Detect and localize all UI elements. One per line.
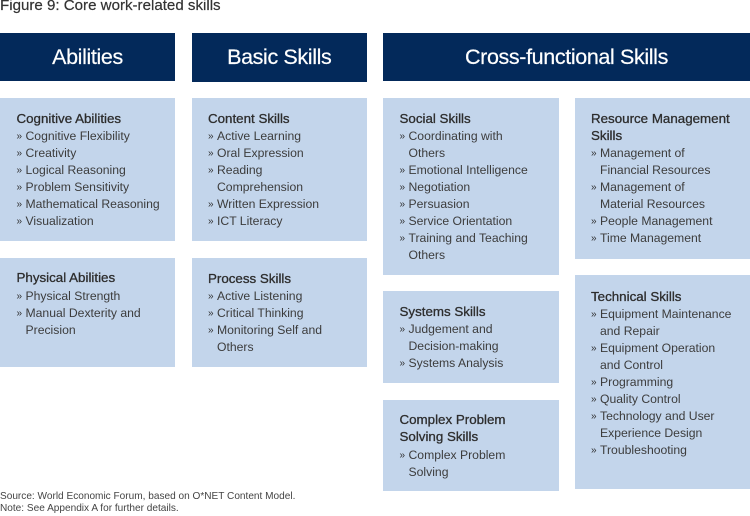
panel: Social Skills: »	[400, 182, 405, 193]
panel: Technical Skills: and Control	[600, 358, 663, 372]
header: Basic Skills	[192, 33, 367, 82]
panel: Systems Skills: »	[400, 324, 405, 335]
panel: Social Skills: »	[400, 165, 405, 176]
panel: Complex Problem Solving Skills: Solving	[408, 465, 448, 479]
panel: Technical Skills: Experience Design	[600, 426, 702, 440]
panel: Physical Abilities: Physical Abilities	[16, 270, 115, 285]
panel: Technical Skills: Technology and User	[600, 409, 714, 423]
panel: Complex Problem Solving Skills: Solving Skills	[400, 429, 478, 444]
panel: Content Skills: Comprehension	[217, 180, 303, 194]
panel: Social Skills	[383, 98, 558, 275]
panel: Technical Skills: »	[591, 445, 597, 456]
panel: Technical Skills: »	[591, 394, 597, 405]
panel: Social Skills: Others	[408, 248, 445, 262]
panel: Social Skills: Service Orientation	[408, 214, 512, 228]
panel: Systems Skills: Systems Analysis	[408, 356, 503, 370]
panel: Resource Management Skills: People Management	[600, 214, 712, 228]
panel: Cognitive Abilities	[0, 98, 175, 241]
panel: Resource Management Skills: Management of	[600, 146, 685, 160]
panel: Physical Abilities: »	[16, 291, 22, 302]
panel: Social Skills: Emotional Intelligence	[408, 163, 528, 177]
panel: Complex Problem Solving Skills: »	[400, 450, 405, 461]
panel: Social Skills: »	[400, 199, 405, 210]
panel: Social Skills: »	[400, 216, 405, 227]
panel: Resource Management Skills	[574, 98, 750, 259]
panel: Complex Problem Solving Skills: Complex Problem	[400, 412, 506, 427]
panel: Resource Management Skills: »	[591, 233, 597, 244]
panel: Physical Abilities: Manual Dexterity and	[26, 306, 141, 320]
panel: Systems Skills: »	[400, 358, 405, 369]
panel: Cognitive Abilities: Cognitive Abilities	[16, 111, 121, 126]
panel: Content Skills: »	[208, 199, 214, 210]
panel: Systems Skills: Judgement and	[408, 322, 493, 336]
panel: Resource Management Skills: »	[591, 182, 597, 193]
panel: Technical Skills: Programming	[600, 375, 673, 389]
panel: Technical Skills: Equipment Operation	[600, 341, 715, 355]
header: Basic Skills: Basic Skills	[227, 45, 331, 69]
panel: Resource Management Skills: Management of	[600, 180, 685, 194]
panel: Process Skills	[192, 258, 367, 367]
panel: Cognitive Abilities: Logical Reasoning	[26, 163, 126, 177]
panel: Physical Abilities	[0, 258, 175, 367]
panel: Technical Skills: and Repair	[600, 324, 660, 338]
source note: Note: See Appendix A for further details.	[0, 503, 179, 514]
panel: Social Skills: Negotiation	[408, 180, 470, 194]
panel: Social Skills: Others	[408, 146, 445, 160]
panel: Cognitive Abilities: »	[16, 182, 22, 193]
panel: Physical Abilities: »	[16, 308, 22, 319]
panel: Content Skills: Written Expression	[217, 197, 319, 211]
panel: Content Skills: »	[208, 216, 214, 227]
source note	[0, 490, 295, 514]
panel: Content Skills	[192, 98, 367, 241]
panel: Systems Skills: Systems Skills	[400, 304, 486, 319]
panel: Technical Skills: »	[591, 343, 597, 354]
panel: Process Skills: »	[208, 308, 214, 319]
panel: Cognitive Abilities: »	[16, 148, 22, 159]
panel: Resource Management Skills: Skills	[591, 128, 622, 143]
panel: Content Skills: ICT Literacy	[217, 214, 282, 228]
panel: Technical Skills: Quality Control	[600, 392, 681, 406]
panel: Social Skills: Coordinating with	[408, 129, 503, 143]
panel: Resource Management Skills: Time Management	[600, 231, 701, 245]
panel: Cognitive Abilities: Cognitive Flexibility	[26, 129, 130, 143]
panel: Technical Skills: Technical Skills	[591, 289, 681, 304]
panel: Process Skills: »	[208, 291, 214, 302]
panel: Physical Abilities: Physical Strength	[26, 289, 120, 303]
panel: Cognitive Abilities: Mathematical Reasoning	[26, 197, 160, 211]
panel: Technical Skills: »	[591, 377, 597, 388]
panel: Cognitive Abilities: »	[16, 165, 22, 176]
panel: Content Skills: »	[208, 148, 214, 159]
panel: Resource Management Skills: »	[591, 148, 597, 159]
panel: Content Skills: »	[208, 131, 214, 142]
panel: Process Skills: Monitoring Self and	[217, 323, 322, 337]
header: Abilities	[0, 33, 175, 81]
panel: Social Skills: Social Skills	[400, 111, 471, 126]
panel: Process Skills: Active Listening	[217, 289, 302, 303]
panel: Resource Management Skills: Financial Resources	[600, 163, 710, 177]
panel: Complex Problem Solving Skills	[383, 400, 558, 491]
panel: Systems Skills: Decision-making	[408, 339, 499, 353]
panel: Resource Management Skills: Material Resources	[600, 197, 705, 211]
panel: Social Skills: »	[400, 131, 405, 142]
source note: Source: World Economic Forum, based on O*NET Content Model.	[0, 490, 295, 502]
panel: Content Skills: »	[208, 165, 214, 176]
panel: Process Skills: Process Skills	[208, 271, 291, 286]
panel: Technical Skills: Troubleshooting	[600, 443, 687, 457]
header: Abilities: Abilities	[52, 45, 123, 69]
panel: Cognitive Abilities: »	[16, 131, 22, 142]
panel: Resource Management Skills: »	[591, 216, 597, 227]
panel: Process Skills: »	[208, 325, 214, 336]
header: Cross-functional Skills: Cross-functional Skills	[465, 45, 668, 69]
panel: Cognitive Abilities: »	[16, 199, 22, 210]
panel: Cognitive Abilities: Problem Sensitivity	[26, 180, 129, 194]
panel: Technical Skills: Equipment Maintenance	[600, 307, 731, 321]
panel: Content Skills: Reading	[217, 163, 262, 177]
panel: Technical Skills	[574, 275, 750, 489]
panel: Systems Skills	[383, 291, 558, 383]
panel: Social Skills: »	[400, 233, 405, 244]
panel: Content Skills: Oral Expression	[217, 146, 304, 160]
panel: Resource Management Skills: Resource Management	[591, 111, 730, 126]
panel: Cognitive Abilities: Visualization	[26, 214, 94, 228]
panel: Technical Skills: »	[591, 309, 597, 320]
panel: Complex Problem Solving Skills: Complex Problem	[408, 448, 505, 462]
panel: Physical Abilities: Precision	[26, 323, 76, 337]
panel: Social Skills: Persuasion	[408, 197, 469, 211]
panel: Cognitive Abilities: »	[16, 216, 22, 227]
panel: Content Skills: Content Skills	[208, 111, 290, 126]
panel: Technical Skills: »	[591, 411, 597, 422]
panel: Cognitive Abilities: Creativity	[26, 146, 76, 160]
panel: Social Skills: Training and Teaching	[408, 231, 528, 245]
header: Cross-functional Skills	[383, 33, 750, 81]
panel: Content Skills: Active Learning	[217, 129, 301, 143]
panel: Process Skills: Others	[217, 340, 254, 354]
panel: Process Skills: Critical Thinking	[217, 306, 303, 320]
